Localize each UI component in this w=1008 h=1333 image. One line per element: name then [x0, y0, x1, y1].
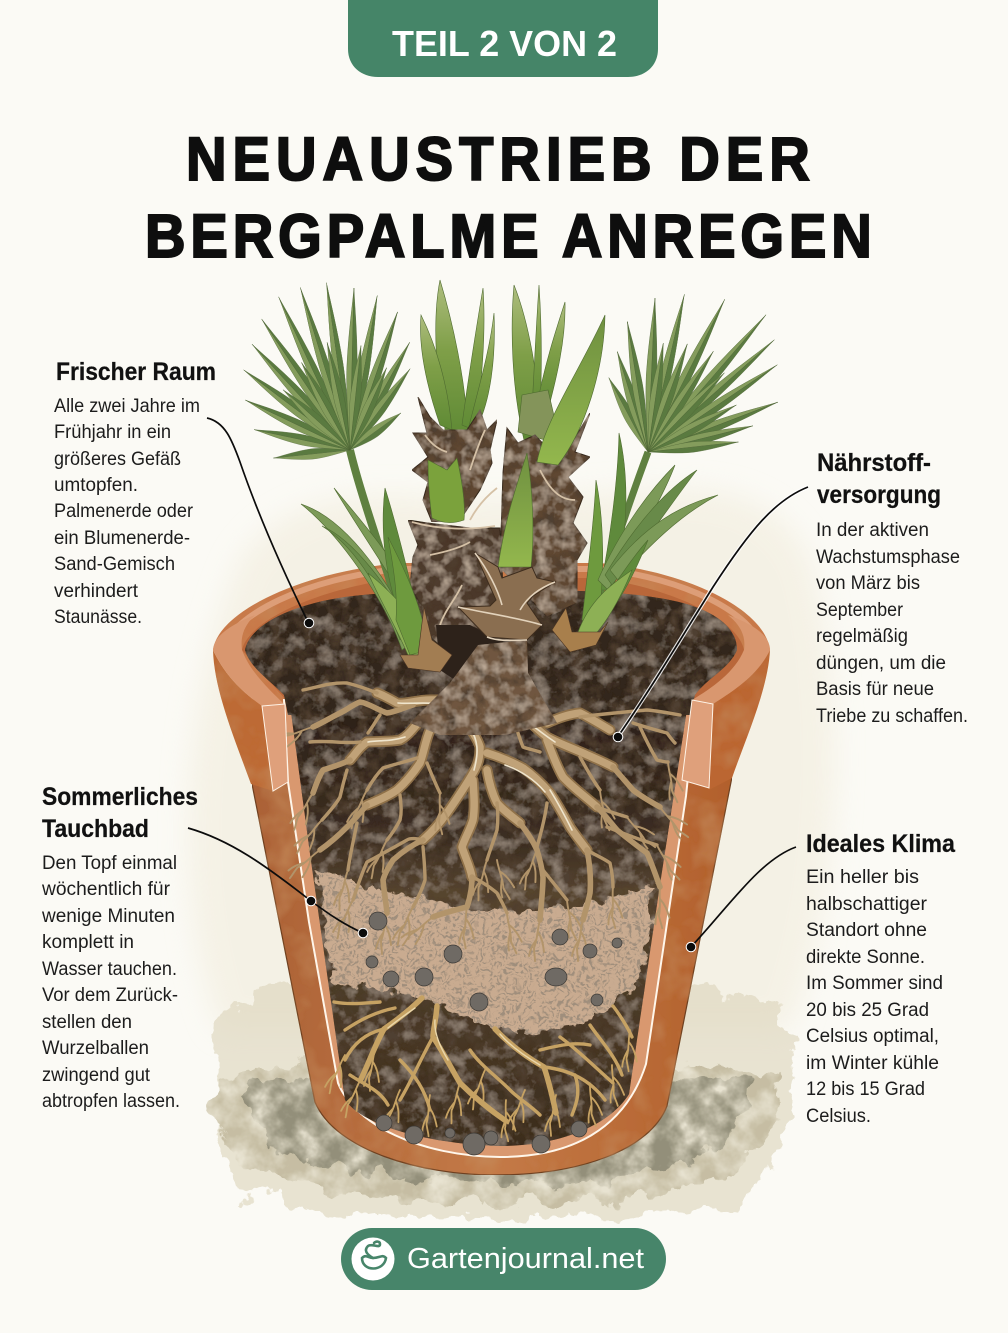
callout leader: Frischer Raum	[207, 418, 314, 628]
body: Ideales Klima: Ein heller bis	[806, 867, 919, 888]
title	[145, 126, 872, 271]
body: Frischer Raum: größeres Gefäß	[54, 449, 181, 470]
palm: left trunk lower collar	[408, 520, 503, 650]
body: Nährstoffversorgung: Wachstumsphase	[816, 547, 960, 568]
text block: Nährstoffversorgung	[816, 449, 968, 727]
palm: left trunk upper	[412, 397, 497, 522]
right shoot	[552, 433, 718, 652]
callout leader: Nährstoffversorgung	[613, 487, 808, 742]
body: Nährstoffversorgung: In der aktiven	[816, 520, 929, 541]
title: BERGPALME ANREGEN	[145, 203, 872, 271]
body: Sommerliches Tauchbad: wenige Minuten	[41, 906, 175, 927]
body: Ideales Klima: Celsius.	[806, 1106, 871, 1127]
body: Nährstoffversorgung: von März bis	[816, 573, 920, 594]
heading: Nährstoffversorgung: versorgung	[817, 481, 941, 509]
left stub leaf	[428, 458, 464, 523]
body: Nährstoffversorgung: regelmäßig	[816, 626, 908, 647]
body: Nährstoffversorgung: September	[816, 600, 904, 621]
top banner: Teil 2 von 2	[348, 0, 658, 77]
upper roots	[272, 683, 694, 961]
body: Nährstoffversorgung	[816, 520, 968, 727]
root highlights	[368, 703, 572, 830]
body: Ideales Klima: 12 bis 15 Grad	[806, 1079, 925, 1100]
body: Ideales Klima: Im Sommer sind	[806, 973, 943, 994]
body: Frischer Raum: verhindert	[54, 581, 139, 602]
body: Sommerliches Tauchbad: zwingend gut	[42, 1065, 151, 1086]
body: Frischer Raum	[54, 396, 200, 628]
text block: Sommerliches Tauchbad	[41, 783, 198, 1112]
body: Sommerliches Tauchbad: stellen den	[42, 1012, 132, 1033]
body: Nährstoffversorgung: Triebe zu schaffen.	[816, 706, 968, 727]
illustration: palm in cutaway terracotta pot	[213, 280, 780, 1175]
body: Frischer Raum: Palmenerde oder	[54, 501, 194, 522]
body: Ideales Klima: halbschattiger	[806, 894, 928, 915]
collar fibres	[412, 430, 575, 625]
center green shoot	[498, 453, 533, 567]
palm: right fan with stem	[590, 293, 780, 625]
pebbles	[366, 912, 622, 1155]
body: Ideales Klima: 20 bis 25 Grad	[806, 1000, 929, 1021]
body: Frischer Raum: umtopfen.	[54, 475, 138, 496]
top banner: Teil 2 von 2: TEIL 2 VON 2	[392, 23, 617, 64]
sand layer	[315, 870, 655, 1032]
body: Nährstoffversorgung: Basis für neue	[816, 679, 934, 700]
background washes	[188, 489, 835, 1219]
center trunk and rhizome	[410, 553, 557, 735]
callout leader: Ideales Klima	[686, 847, 796, 952]
body: Sommerliches Tauchbad: komplett in	[42, 932, 134, 953]
left rim front piece	[213, 615, 288, 791]
right rim front piece	[682, 615, 770, 790]
right cluster big leaf	[537, 315, 605, 465]
heading: Frischer Raum: Frischer Raum	[56, 358, 216, 386]
body: Frischer Raum: Alle zwei Jahre im	[54, 396, 200, 417]
body: Frischer Raum: ein Blumenerde-	[54, 528, 190, 549]
body: Frischer Raum: Sand-Gemisch	[54, 554, 175, 575]
heading: Nährstoffversorgung	[817, 449, 941, 509]
left shoot	[301, 488, 452, 672]
body: Sommerliches Tauchbad: wöchentlich für	[41, 879, 171, 900]
icon: sprout in pot logo	[352, 1238, 394, 1280]
footer badge: Gartenjournal.net: Gartenjournal.net	[407, 1243, 644, 1275]
heading: Sommerliches Tauchbad: Sommerliches	[42, 783, 198, 811]
pot cut face	[284, 700, 696, 1157]
body: Sommerliches Tauchbad	[41, 853, 180, 1112]
body: Sommerliches Tauchbad: Vor dem Zurück-	[42, 985, 178, 1006]
body: Sommerliches Tauchbad: abtropfen lassen.	[42, 1091, 180, 1112]
center leaves behind trunks: right cluster	[512, 285, 565, 440]
soil cross-section	[288, 690, 690, 1146]
heading: Ideales Klima: Ideales Klima	[806, 830, 956, 858]
heading: Nährstoffversorgung: Nährstoff-	[817, 449, 931, 477]
center leaves behind trunks: left cluster	[420, 280, 494, 435]
pot outer wall	[252, 700, 732, 1175]
text block: Ideales Klima	[806, 830, 956, 1127]
text block: Frischer Raum	[54, 358, 216, 628]
body: Sommerliches Tauchbad: Den Topf einmal	[42, 853, 177, 874]
callout leader: Sommerliches Tauchbad	[188, 828, 368, 938]
top soil surface	[245, 590, 737, 715]
body: Nährstoffversorgung: düngen, um die	[816, 653, 946, 674]
body: Sommerliches Tauchbad: Wasser tauchen.	[42, 959, 177, 980]
body: Ideales Klima: Celsius optimal,	[806, 1026, 939, 1047]
heading: Sommerliches Tauchbad	[42, 783, 198, 843]
heading: Sommerliches Tauchbad: Tauchbad	[42, 815, 149, 843]
body: Frischer Raum: Staunässe.	[54, 607, 142, 628]
pot back rim	[213, 563, 770, 720]
body: Ideales Klima: direkte Sonne.	[806, 947, 925, 968]
body: Ideales Klima: im Winter kühle	[806, 1053, 939, 1074]
body: Frischer Raum: Frühjahr in ein	[54, 422, 171, 443]
palm: right trunk	[500, 413, 590, 617]
title: NEUAUSTRIEB DER	[186, 126, 810, 194]
footer badge: Gartenjournal.net	[341, 1228, 666, 1290]
body: Sommerliches Tauchbad: Wurzelballen	[42, 1038, 149, 1059]
body: Ideales Klima: Standort ohne	[806, 920, 927, 941]
palm: left fan with stem	[241, 282, 414, 640]
body: Ideales Klima	[806, 867, 943, 1127]
lower roots	[324, 998, 638, 1142]
